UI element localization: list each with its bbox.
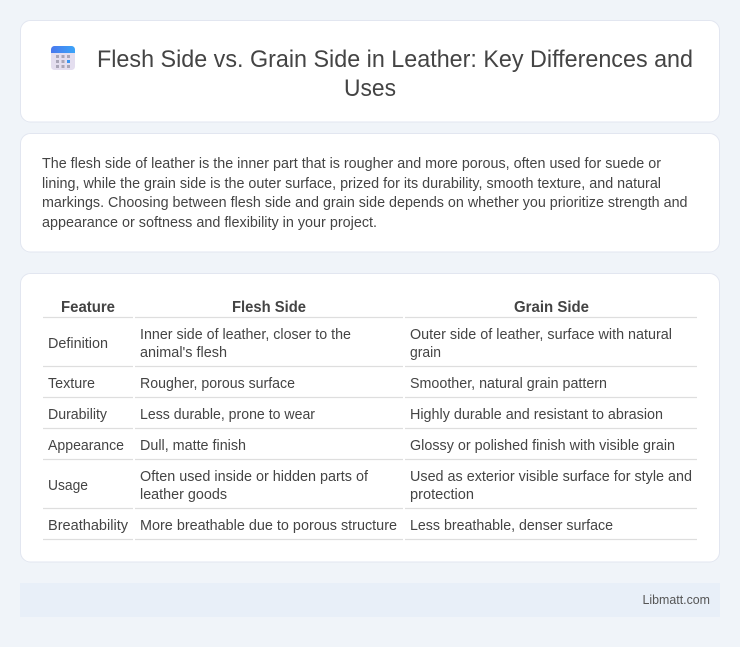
title (97, 46, 693, 102)
table header row: Grain Side (514, 299, 589, 316)
row: durability: Less durable, prone to wear (140, 406, 315, 423)
row: usage: Used as exterior visible surface for style and (410, 468, 692, 485)
row: texture (48, 375, 607, 392)
row: durability: Durability (48, 406, 107, 423)
row: texture: Smoother, natural grain pattern (410, 375, 607, 392)
row: durability (48, 406, 663, 423)
text block: introduction: lining, while the grain side is the outer surface, prized for its durability, smooth texture, and natural (42, 175, 661, 192)
footer: Libmatt.com (642, 592, 710, 607)
footer (20, 583, 720, 617)
row: texture: Rougher, porous surface (140, 375, 295, 392)
panel: comparison table (20, 274, 720, 562)
row: usage: leather goods (140, 486, 227, 503)
text block: introduction: The flesh side of leather is the inner part that is rougher and more porous, often used for suede or (42, 155, 661, 172)
row: breathability: Less breathable, denser surface (410, 517, 613, 534)
panel: title header (20, 20, 720, 122)
row: definition: Outer side of leather, surface with natural (410, 326, 672, 343)
row: durability: Highly durable and resistant to abrasion (410, 406, 663, 423)
row: usage: protection (410, 486, 474, 503)
row: definition: Inner side of leather, closer to the (140, 326, 351, 343)
row: appearance: Glossy or polished finish with visible grain (410, 437, 675, 454)
row: definition: Definition (48, 335, 108, 352)
row: appearance: Dull, matte finish (140, 437, 246, 454)
text block: introduction (42, 155, 688, 231)
icon: calendar (51, 46, 75, 70)
text block: introduction: appearance or softness and flexibility in your project. (42, 214, 377, 231)
row: breathability: Breathability (48, 517, 128, 534)
row: usage: Usage (48, 477, 88, 494)
row: usage: Often used inside or hidden parts of (140, 468, 369, 485)
table header row: Feature (61, 299, 115, 316)
text block: introduction: markings. Choosing between flesh side and grain side depends on whether you prioritize strength and (42, 194, 688, 211)
row: texture: Texture (48, 375, 95, 392)
row: definition (48, 326, 672, 361)
row: breathability: More breathable due to porous structure (140, 517, 397, 534)
row: definition: animal's flesh (140, 344, 227, 361)
row: usage (48, 468, 692, 503)
table header row (61, 299, 589, 316)
title: Flesh Side vs. Grain Side in Leather: Key Differences and (97, 46, 693, 73)
title: Uses (344, 75, 396, 102)
table header row: Flesh Side (232, 299, 306, 316)
row: breathability (48, 517, 613, 534)
panel: introduction (20, 134, 720, 252)
row: definition: grain (410, 344, 441, 361)
row: appearance (48, 437, 675, 454)
row: appearance: Appearance (48, 437, 124, 454)
